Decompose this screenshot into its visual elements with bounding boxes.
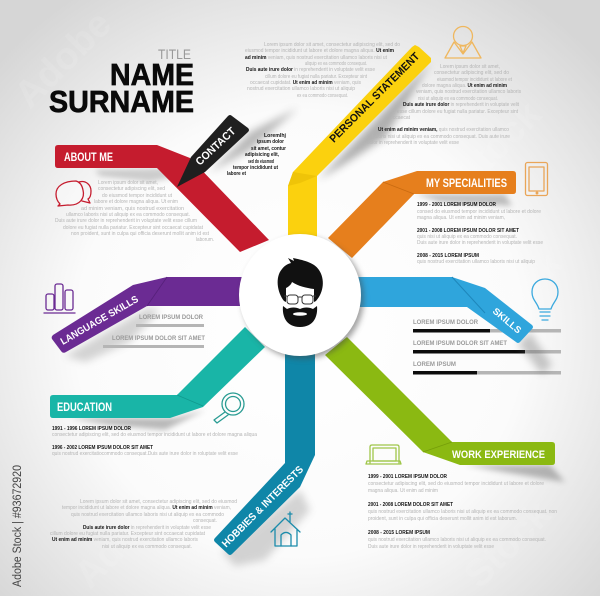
icon: house — [271, 512, 300, 546]
text block: ullamco laboris nisi ut aliquip ex ea commodo consequat. — [66, 212, 190, 218]
teal ribbon: EDUCATION — [57, 402, 112, 414]
panel: language skills — [44, 277, 245, 362]
text block: consequat. — [193, 518, 217, 524]
skill bars: LOREM IPSUM DOLOR — [413, 320, 479, 326]
green ribbon: WORK EXPERIENCE — [452, 449, 545, 461]
panel: my specialities — [328, 162, 548, 265]
language bars: LOREM IPSUM DOLOR SIT AMET — [112, 336, 205, 342]
right text block: Lorem ipsum dolor sit amet, — [440, 64, 500, 70]
skill bars: LOREM IPSUM DOLOR SIT AMET — [413, 341, 507, 347]
ribbon shadow — [70, 410, 205, 430]
text block: cillum dolore eu fugiat nulla pariatur. Excepteur sint occaecat cupidatat — [50, 531, 206, 537]
icon: tablet — [526, 162, 548, 196]
text block: Ut enim ad minim veniam, quis nostrud exercitation ullamco laboris — [52, 537, 198, 543]
text block: Duis aute irure dolor in reprehenderit in voluptate velit esse cillum — [55, 218, 197, 224]
panel: about me — [55, 145, 269, 252]
timeline text: consed do eiusmod tempor incididunt ut labore et dolore — [417, 209, 541, 215]
central portrait — [239, 234, 364, 359]
yellow ribbon — [288, 45, 431, 240]
icon: chat bubbles — [56, 181, 91, 206]
text block: Duis aute irure dolor in reprehenderit in voluptate velit esse — [83, 525, 211, 531]
contact details: labore et — [227, 171, 246, 177]
tag shadow — [210, 108, 298, 172]
panel: work experience — [325, 337, 565, 550]
right text block: occaecat — [390, 115, 411, 121]
text block: tempor incididunt ut labore et dolore magna aliqua. Ut enim ad minim veniam, — [62, 505, 231, 511]
right text block: Ut enim ad minim veniam, quis nostrud exercitation ullamco — [378, 127, 509, 133]
teal-blue ribbon: HOBBIES & INTERESTS — [220, 464, 306, 550]
timeline text — [417, 202, 543, 265]
left text block: nostrud exercitation ullamco laboris nisi ut aliquip — [247, 86, 355, 92]
text block: labore et dolore magna aliqua. Ut enim — [94, 199, 178, 205]
left text block: ex ea commodo consequat. — [297, 93, 348, 99]
timeline text: Duis aute irure dolor in reprehenderit in voluptate velit esse — [368, 544, 494, 550]
blue ribbon: SKILLS — [490, 306, 523, 336]
name: NAME — [110, 58, 194, 92]
text block: Lorem ipsum dolor sit amet, consectetur adipiscing elit, sed do eiusmod — [80, 499, 237, 505]
panel: contact — [177, 108, 298, 187]
icon: magnifier — [214, 393, 244, 423]
purple ribbon — [52, 277, 245, 353]
panel: personal statement — [245, 26, 521, 240]
watermarks: Adobe Stock — [107, 42, 301, 236]
timeline text: quis nostrud exercitation ullamco laboris nisi ut aliquip ex ea commodo consequat. — [368, 537, 546, 543]
right text block: consectetur adipiscing elit, sed do — [434, 70, 509, 76]
text block: Lorem ipsum dolor sit amet, — [98, 180, 158, 186]
white circle — [239, 234, 361, 356]
right text block: eiusmod tempor incididunt ut labore et — [437, 77, 512, 83]
ribbon shadow — [415, 194, 512, 206]
ribbon shadow — [318, 62, 431, 180]
orange ribbon — [328, 171, 516, 258]
timeline text: 1996 - 2002 LOREM IPSUM DOLOR SIT AMET — [52, 445, 154, 451]
contact details: Loremlhj — [264, 133, 287, 139]
contact details: sit amet, contur — [251, 146, 286, 152]
text block: ad minim veniam, quis nostrud exercitation — [81, 206, 184, 212]
timeline text: quis nisi ut aliquip ex ea commodo consequat. — [417, 234, 517, 240]
text block: do eiusmod tempor incididunt ut — [102, 193, 173, 199]
teal-blue ribbon — [214, 345, 315, 555]
icon: person — [445, 26, 481, 58]
purple ribbon: LANGUAGE SKILLS — [59, 294, 141, 348]
orange ribbon: MY SPECIALITIES — [426, 178, 507, 190]
timeline text: quis nostrud exercitation ullamco laboris nisi ut aliquip — [417, 259, 535, 265]
ribbon shadow — [65, 308, 160, 362]
timeline text: 2001 - 2008 LOREM DOLOR SIT AMET — [368, 502, 454, 508]
red ribbon: ABOUT ME — [64, 150, 113, 164]
text block — [50, 499, 237, 550]
left text block: cillum dolore eu fugiat nulla pariatur. Excepteur sint — [265, 74, 367, 80]
right text block: esse cillum dolore eu fugiat nulla pariatur. Excepteur sint — [397, 109, 519, 115]
right text block: nisi ut aliquip ex ea commodo consequat. — [418, 96, 498, 102]
right text block: veniam, quis nostrud exercitation ullamco laboris — [416, 89, 521, 95]
title label: TITLE — [158, 46, 191, 62]
ribbon shadow — [518, 332, 552, 374]
timeline text: consectetur adipiscing elit, sed do eiusmod tempor incididunt ut labore et dolore magna aliqua — [52, 432, 257, 438]
timeline text: 1991 - 1996 LOREM IPSUM DOLOR — [52, 426, 131, 432]
timeline text — [368, 474, 557, 550]
timeline text: consectetur adipiscing elit, sed do eiusmod tempor incididunt ut labore et dolore — [368, 481, 544, 487]
watermarks: Adobe — [7, 3, 120, 116]
text block: quis nostrud exercitation ullamco laboris nisi ut aliquip ex ea commodo — [71, 512, 224, 518]
contact details: adipisicing elit, — [245, 152, 279, 158]
text block — [55, 180, 214, 243]
timeline text: proident, sunt in culpa qui officia deserunt mollit anim id est laborum. — [368, 516, 517, 522]
timeline text: quis nostrud exercitatiocommodo consequat.Duis aute irure dolor in roluptate velit esse — [52, 451, 238, 457]
title block — [49, 46, 194, 119]
timeline text: 1999 - 2001 LOREM IPSUM DOLOR — [368, 474, 447, 480]
right text block: laboris nisi ut aliquip ex ea commodo consequat. Duis aute irure — [372, 134, 510, 140]
left text block: aliquip ex ea commodo consequat. — [305, 61, 367, 67]
icon: bar chart — [44, 284, 75, 313]
watermarks: Adobe Stock — [377, 242, 571, 436]
teal ribbon — [50, 327, 265, 418]
text block: non proident, sunt in culpa qui officia deserunt mollit anim id est — [71, 231, 210, 237]
left text block: Lorem ipsum dolor sit amet, consectetur adipiscing elit, sed do — [264, 42, 400, 48]
left text block: occaecat cupidatat. Ut enim ad minim veniam, quis — [250, 80, 361, 86]
timeline text: 2008 - 2015 LOREM IPSUM — [417, 253, 479, 259]
text block: laborum. — [196, 237, 214, 243]
text block: dolore eu fugiat nulla pariatur. Excepteur sint occaecat cupidatat — [63, 225, 204, 231]
watermarks: Stock — [447, 93, 550, 196]
ribbon shadow — [222, 490, 310, 566]
ribbon shadow — [465, 465, 565, 482]
skill bars: LOREM IPSUM — [413, 362, 456, 368]
contact details — [227, 133, 287, 177]
watermarks: Adobe Stock — [67, 402, 261, 596]
stock credit: Adobe Stock | #93672920 — [12, 465, 24, 587]
right text block: dolore magna aliqua. Ut enim ad minim — [422, 83, 507, 89]
timeline text: 2008 - 2015 LOREM IPSUM — [368, 530, 430, 536]
black tag: CONTACT — [194, 125, 239, 168]
panel: education — [50, 327, 265, 457]
timeline text: 1999 - 2001 LOREM IPSUM DOLOR — [417, 202, 496, 208]
panel: skills — [355, 277, 561, 374]
contact details: ipsum dolor — [257, 139, 284, 145]
green ribbon — [325, 337, 555, 465]
right text block: dolor in reprehenderit in voluptate velit esse — [367, 140, 459, 146]
panel: hobbies and interests — [50, 345, 315, 566]
timeline text — [52, 426, 257, 457]
right text block — [367, 64, 521, 146]
right text block: Duis aute irure dolor in reprehenderit in voluptate velit — [403, 102, 520, 108]
language bars: LOREM IPSUM DOLOR — [139, 315, 204, 321]
left text block: Duis aute irure dolor in reprehenderit in voluptate velit esse — [246, 67, 375, 73]
surname: SURNAME — [49, 85, 194, 119]
text block: consectetur adipiscing elit, sed — [98, 186, 165, 192]
circle shadow — [242, 237, 364, 359]
icon: laptop — [366, 445, 401, 464]
contact details: sed do eiusmod — [248, 159, 274, 165]
text block: nisi ut aliquip ex ea commodo consequat. — [102, 544, 192, 550]
left text block: eiusmod tempor incididunt ut labore et dolore magna aliqua. Ut enim — [245, 48, 394, 54]
left text block — [245, 42, 400, 99]
timeline text: quis nostrud exercitation ullamco laboris nisi ut aliquip ex ea commodo consequat. non — [368, 509, 557, 515]
language bars — [103, 315, 205, 348]
yellow ribbon: PERSONAL STATEMENT — [328, 50, 422, 145]
skill bars — [413, 320, 561, 374]
blue ribbon — [355, 277, 533, 343]
ribbon shadow — [95, 168, 185, 182]
timeline text: magna aliqua. Ut enim ad minim veniam, — [417, 215, 505, 221]
timeline text: 2001 - 2008 LOREM IPSUM DOLOR SIT AMET — [417, 228, 520, 234]
red ribbon — [55, 145, 269, 252]
icon: light bulb — [532, 279, 558, 320]
timeline text: magna aliqua. Ut enim ad minim — [368, 488, 438, 494]
timeline text: Duis aute irure dolor in reprehenderit in voluptate velit esse — [417, 240, 543, 246]
contact details: tempor incididunt ut — [233, 165, 278, 171]
left text block: ad minim veniam, quis nostrud exercitation ullamco laboris nisi ut — [245, 55, 388, 61]
watermarks: Stock — [457, 493, 560, 596]
icon: bearded face — [278, 258, 323, 327]
